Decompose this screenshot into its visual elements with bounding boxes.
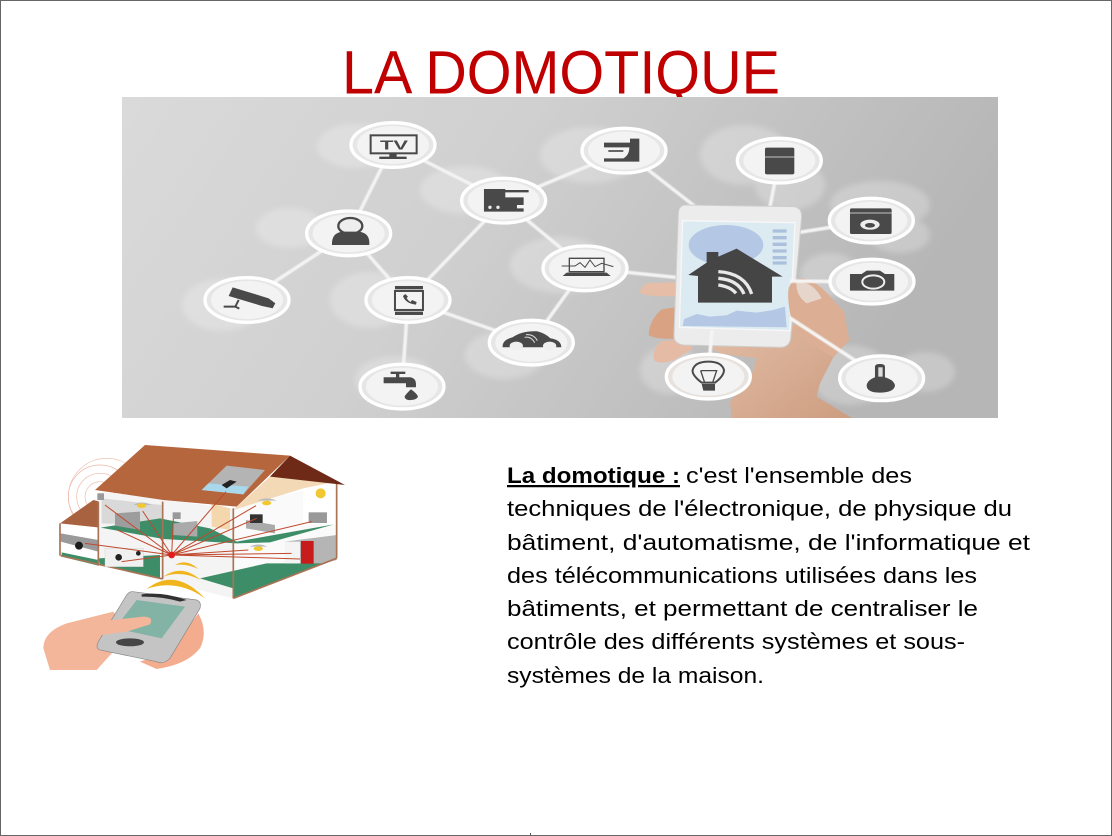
smartphone body: [674, 205, 802, 347]
definition text block: c'est l'ensemble des: [686, 463, 912, 488]
interior back walls: [98, 492, 233, 598]
node: car: [489, 320, 573, 365]
yellow wireless waves: [147, 562, 205, 598]
right roof underside: [270, 456, 345, 485]
definition term: La domotique :: [507, 463, 680, 488]
upper floor: [101, 518, 334, 543]
node: photo camera: [830, 259, 914, 304]
node: TV: [351, 123, 435, 167]
node: security camera: [205, 278, 289, 322]
node: light bulb: [666, 354, 750, 399]
node: TV: TV: [380, 138, 409, 152]
remote screen: [115, 600, 185, 638]
main roof: [95, 445, 290, 507]
house with wifi icon: [688, 249, 783, 303]
signal rings: [68, 458, 145, 535]
node: person: [307, 211, 391, 256]
node: mixer: [582, 128, 666, 173]
ground floor: [98, 555, 323, 598]
smartphone: [674, 205, 802, 347]
phone screen: [679, 221, 795, 331]
remote top detail: [142, 594, 187, 602]
soft clouds behind nodes: [182, 124, 955, 405]
house illustration with remote control: [43, 445, 345, 670]
node: washing machine: [829, 198, 913, 243]
node: phone: [366, 278, 450, 322]
appliances: [97, 488, 327, 567]
screen legend bars: [773, 229, 787, 265]
remote control: [97, 592, 200, 663]
fingertip: [67, 617, 151, 638]
node: fridge: [737, 138, 821, 183]
screen pie chart: [689, 225, 763, 265]
banner background: [122, 97, 998, 418]
palm: [707, 307, 852, 418]
node: thermometer: [840, 356, 924, 401]
device nodes, right part: [543, 128, 924, 401]
node: faucet: [360, 364, 444, 409]
hand behind the phone: [640, 282, 852, 418]
banner image: connected home network: [122, 97, 998, 418]
device nodes, left part: [205, 123, 573, 409]
node: coffee machine: [462, 178, 546, 223]
node: laptop chart: [543, 246, 627, 291]
screen area chart: [683, 307, 787, 327]
definition text block: des télécommunications utilisées dans les: [507, 563, 977, 588]
title: LA DOMOTIQUE: [342, 38, 780, 106]
thumb over the phone: [788, 278, 849, 357]
network links: [247, 145, 871, 387]
fingers: [640, 282, 683, 296]
definition text block: techniques de l'électronique, de physique du: [507, 496, 1012, 521]
links drawn over the hand: [708, 281, 882, 378]
red control arrows: [85, 492, 312, 562]
definition text block: bâtiment, d'automatisme, de l'informatique et: [507, 530, 1031, 555]
hand: [43, 612, 130, 670]
remote buttons: [116, 638, 144, 646]
definition text block: bâtiments, et permettant de centraliser le: [507, 596, 978, 621]
left garage wing: [60, 518, 98, 565]
skylight: [202, 466, 265, 494]
definition text block: contrôle des différents systèmes et sous-: [507, 629, 965, 654]
dividing posts: [61, 482, 337, 598]
definition text block: [507, 463, 1031, 688]
definition text block: systèmes de la maison.: [507, 663, 764, 688]
